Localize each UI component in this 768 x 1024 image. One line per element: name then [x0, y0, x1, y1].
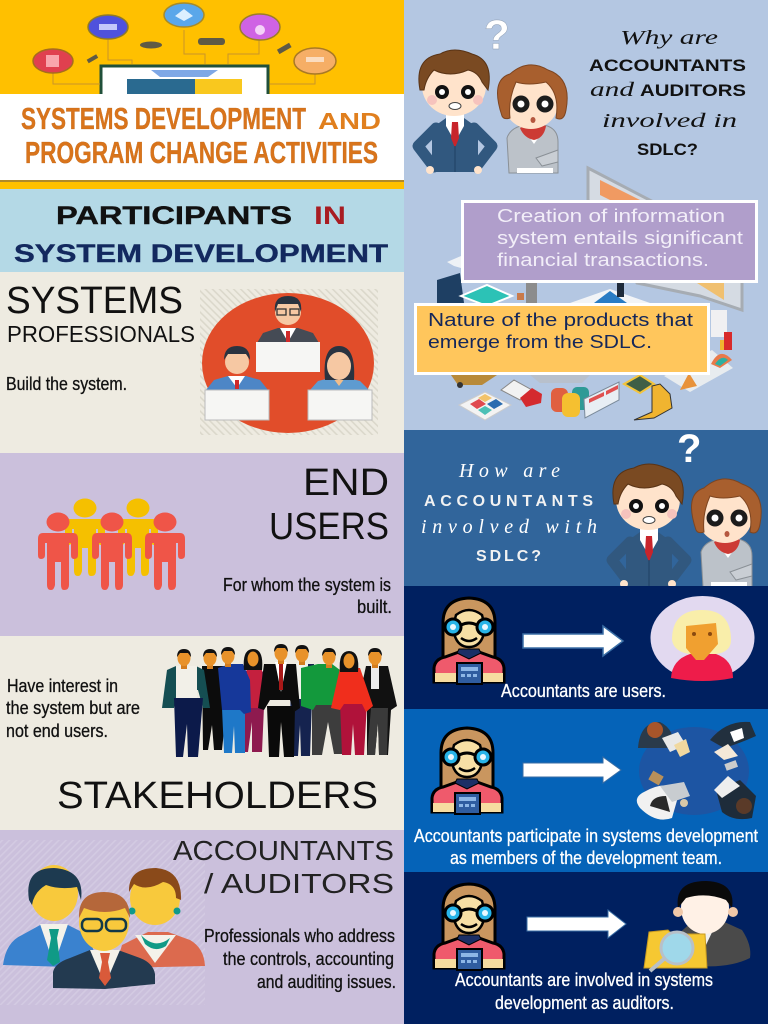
title banner	[0, 94, 404, 182]
icon: question mark: ?	[484, 11, 510, 58]
icon: orange node	[294, 48, 336, 74]
description line 2: built.	[357, 597, 392, 617]
icon: small dark glyphs	[87, 38, 292, 63]
panel: top yellow banner illustration	[0, 0, 404, 190]
panel: end users	[0, 453, 404, 636]
heading: accountants: ACCOUNTANTS	[173, 835, 394, 866]
icon: auditor with folder	[644, 881, 750, 971]
panel: how accountants are involved	[404, 427, 768, 588]
caption line 2: as members of the development team.	[450, 848, 722, 868]
description line 3: not end users.	[6, 721, 108, 741]
title line 1: SYSTEMS DEVELOPMENT	[21, 101, 306, 136]
arrow	[523, 757, 621, 783]
icon: group of people	[38, 498, 185, 590]
question word: auditors: AUDITORS	[640, 81, 746, 100]
illustration: crowd of stakeholders	[162, 644, 397, 757]
title line 2: PROGRAM CHANGE ACTIVITIES	[25, 135, 378, 170]
icon: laptop monitor	[101, 66, 268, 106]
callout line 1: Nature of the products that	[428, 310, 693, 330]
stakeholder heads	[177, 644, 382, 672]
callout line 2: system entails significant	[497, 228, 743, 248]
icon: accountant	[434, 598, 504, 684]
description line 3: and auditing issues.	[257, 972, 396, 992]
caption: Accountants are users.	[501, 681, 666, 701]
caption line 2: development as auditors.	[495, 993, 674, 1013]
panel: accountants / auditors	[0, 830, 404, 1024]
decorative network connector lines	[53, 30, 315, 84]
icon: question mark: ?	[677, 427, 701, 471]
panel: accountants are users	[404, 586, 768, 709]
icon: three accountants	[3, 865, 205, 989]
panel: participants heading	[0, 189, 404, 272]
arrow	[527, 910, 626, 938]
heading: auditors: / AUDITORS	[204, 868, 394, 899]
callout line 2: emerge from the SDLC.	[428, 332, 652, 352]
question line 3: involved with	[421, 516, 597, 538]
icon: red node	[33, 49, 73, 73]
question line 1: How are	[458, 460, 560, 482]
description: Build the system.	[6, 374, 127, 394]
description line 2: the system but are	[6, 698, 140, 718]
callout line 3: financial transactions.	[497, 250, 709, 270]
heading: end: END	[303, 462, 389, 504]
question line 4: involved in	[602, 110, 737, 132]
heading: users: USERS	[269, 506, 389, 548]
question line 2: ACCOUNTANTS	[589, 56, 746, 75]
title word: and: AND	[318, 108, 381, 134]
arrow	[523, 626, 623, 656]
heading word: in: IN	[314, 202, 346, 230]
panel: stakeholders	[0, 636, 404, 830]
callout: yellow reason	[416, 304, 708, 374]
icon: sky blue node	[164, 3, 204, 27]
illustration: confused man and woman	[418, 50, 567, 174]
question line 1: Why are	[620, 27, 718, 49]
panel: systems professionals	[0, 272, 404, 453]
description line 2: the controls, accounting	[223, 949, 394, 969]
heading line: system development: SYSTEM DEVELOPMENT	[14, 240, 388, 268]
illustration: monitor behind callouts	[588, 168, 742, 310]
icon: accountant	[434, 884, 504, 970]
callout line 1: Creation of information	[497, 206, 725, 226]
description line 1: Have interest in	[7, 676, 118, 696]
icon: team at laptops	[200, 289, 378, 435]
description line 1: For whom the system is	[223, 575, 391, 595]
question line 5: SDLC?	[637, 140, 698, 159]
heading: professionals: PROFESSIONALS	[7, 321, 195, 347]
panel: accountants on development team	[404, 709, 768, 872]
icon: accountant	[432, 728, 502, 814]
question line 4: SDLC?	[476, 548, 541, 565]
callout: purple reason	[462, 202, 756, 282]
heading word: participants: PARTICIPANTS	[56, 202, 292, 230]
question line 2: ACCOUNTANTS	[424, 493, 593, 510]
panel: why accountants and auditors	[404, 0, 768, 430]
illustration: confused man and woman	[612, 464, 761, 588]
caption line 1: Accountants are involved in systems	[455, 970, 713, 990]
illustration: servers and small objects	[437, 256, 733, 420]
icon: user avatar	[650, 596, 754, 681]
description line 1: Professionals who address	[204, 926, 395, 946]
heading: systems: SYSTEMS	[6, 280, 183, 322]
illustration: meeting around table	[637, 722, 756, 820]
icon: blue node	[88, 15, 128, 39]
question word: and: and	[590, 79, 635, 101]
panel: accountants as auditors	[404, 872, 768, 1024]
heading: stakeholders: STAKEHOLDERS	[57, 775, 378, 817]
icon: magenta node	[240, 14, 280, 40]
